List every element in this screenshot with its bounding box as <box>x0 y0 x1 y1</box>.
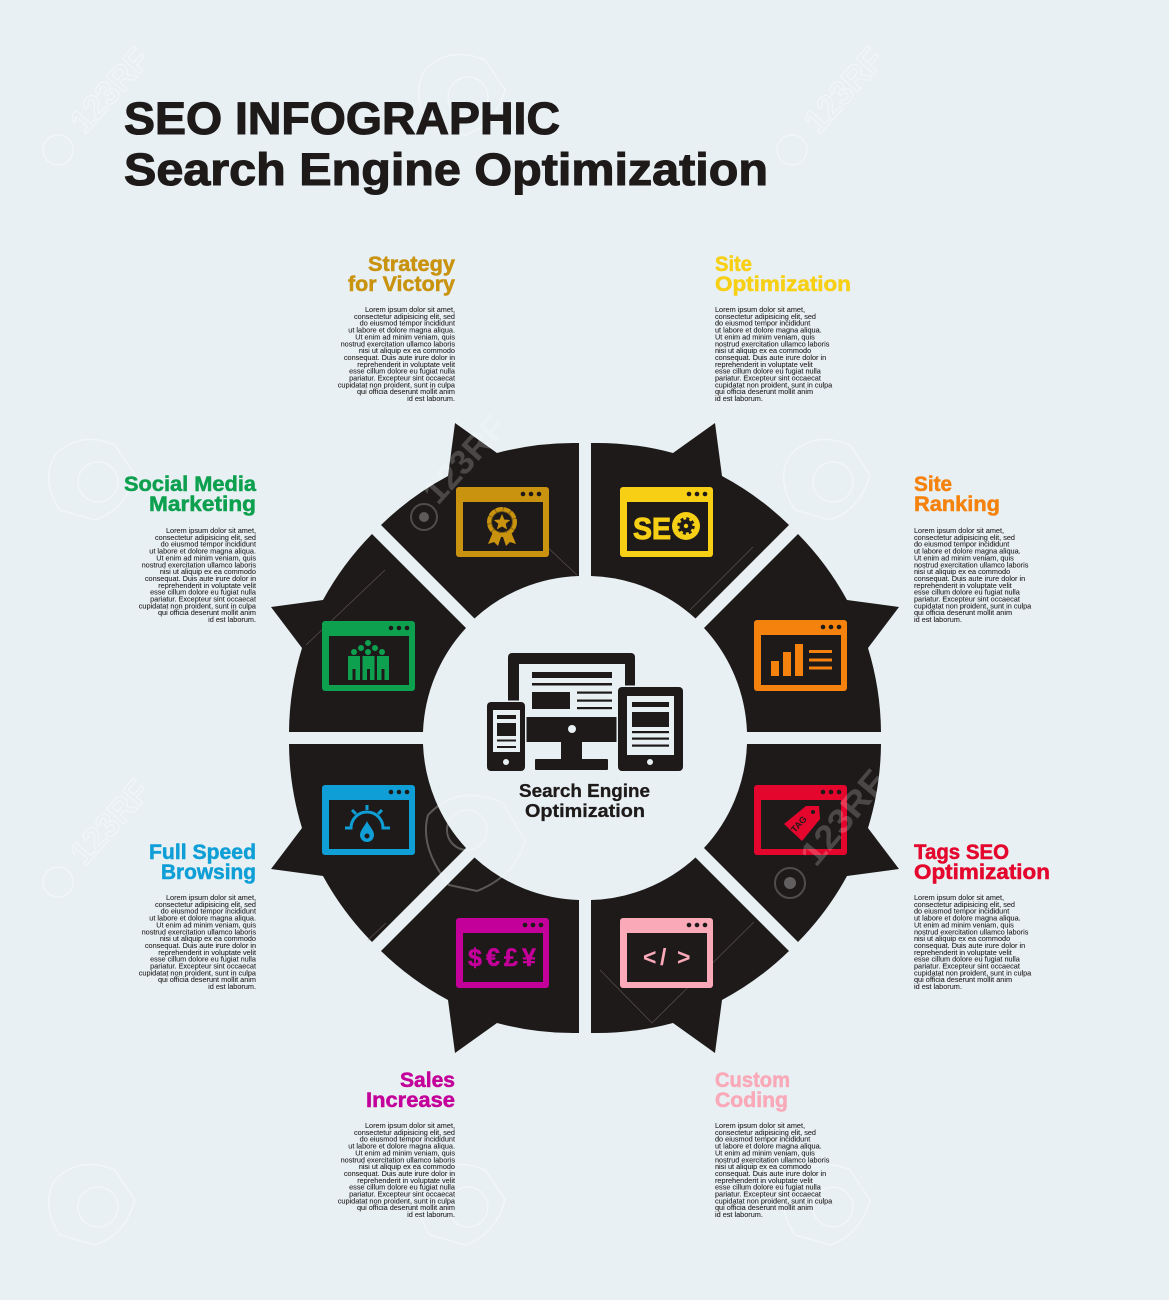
segment: full speed browsing <box>271 744 466 942</box>
body text: cupidatat non proident, sunt in culpa <box>139 601 257 610</box>
body text: esse cillum dolore eu fugiat nulla <box>914 588 1021 597</box>
watermarks on background: 123RF <box>63 773 158 872</box>
heading: Site <box>715 253 752 276</box>
body text: cupidatat non proident, sunt in culpa <box>715 380 833 389</box>
body text: nisi ut aliquip ex ea commodo <box>715 346 811 355</box>
body text: qui officia deserunt mollit anim <box>715 387 813 396</box>
body text: Ut enim ad minim veniam, quis <box>355 1148 455 1157</box>
body text: consequat. Duis aute irure dolor in <box>145 574 256 583</box>
body text: do eiusmod tempor incididunt <box>914 540 1009 549</box>
segment: strategy for victory <box>381 423 579 618</box>
body text: Lorem ipsum dolor sit amet, <box>365 305 455 314</box>
body text: ut labore et dolore magna aliqua. <box>914 914 1021 923</box>
panel: strategy for victory <box>338 253 456 403</box>
body text: do eiusmod tempor incididunt <box>914 907 1009 916</box>
heading: Strategy <box>368 253 455 276</box>
body text: id est laborum. <box>208 982 256 991</box>
body text: nisi ut aliquip ex ea commodo <box>359 1162 455 1171</box>
heading: Sales <box>400 1069 455 1092</box>
body text: nisi ut aliquip ex ea commodo <box>715 1162 811 1171</box>
body text: id est laborum. <box>914 982 962 991</box>
body text: pariatur. Excepteur sint occaecat <box>715 1190 821 1198</box>
body text: Ut enim ad minim veniam, quis <box>914 920 1014 929</box>
body text: pariatur. Excepteur sint occaecat <box>715 374 821 382</box>
watermark over dark segments: 123RF <box>416 408 514 511</box>
body text: id est laborum. <box>208 615 256 624</box>
body text: consectetur adipisicing elit, sed <box>354 312 455 321</box>
body text: do eiusmod tempor incididunt <box>360 319 455 328</box>
body text: nisi ut aliquip ex ea commodo <box>914 934 1010 943</box>
heading: Site <box>914 473 952 496</box>
heading <box>124 473 256 516</box>
body text: qui officia deserunt mollit anim <box>357 1203 455 1212</box>
icon: ranking window <box>754 620 847 691</box>
body text: qui officia deserunt mollit anim <box>158 608 256 617</box>
body text: ut labore et dolore magna aliqua. <box>715 1142 822 1151</box>
body text: nostrud exercitation ullamco laboris <box>341 339 455 348</box>
body text: id est laborum. <box>407 394 455 403</box>
body text: consequat. Duis aute irure dolor in <box>145 941 256 950</box>
heading: Coding <box>715 1089 788 1112</box>
body text: qui officia deserunt mollit anim <box>914 608 1012 617</box>
body text: Lorem ipsum dolor sit amet, <box>166 526 256 535</box>
watermarks on background <box>43 41 892 1245</box>
panel: tags seo optimization <box>914 841 1050 991</box>
body text: consectetur adipisicing elit, sed <box>715 1128 816 1137</box>
body text: cupidatat non proident, sunt in culpa <box>338 1196 456 1205</box>
body text: pariatur. Excepteur sint occaecat <box>349 1190 455 1198</box>
body text: reprehenderit in voluptate velit <box>715 360 813 369</box>
heading <box>348 253 455 296</box>
panel: site ranking <box>914 473 1032 624</box>
heading: Custom <box>715 1069 790 1092</box>
body text: id est laborum. <box>715 1210 763 1219</box>
body text: consequat. Duis aute irure dolor in <box>344 353 455 362</box>
wheel of eight segments <box>271 423 899 1053</box>
body text: reprehenderit in voluptate velit <box>914 581 1012 590</box>
body text: nostrud exercitation ullamco laboris <box>914 560 1029 569</box>
panel: social media marketing <box>124 473 257 624</box>
body text: esse cillum dolore eu fugiat nulla <box>715 367 822 376</box>
heading: for Victory <box>348 273 455 296</box>
watermark over dark segments: 123RF <box>793 763 894 873</box>
panel: custom coding <box>715 1069 833 1219</box>
body text: id est laborum. <box>407 1210 455 1219</box>
segment: tags seo optimization <box>704 744 899 942</box>
body text: Lorem ipsum dolor sit amet, <box>715 305 805 314</box>
body text: ut labore et dolore magna aliqua. <box>914 547 1021 556</box>
body text: consequat. Duis aute irure dolor in <box>914 574 1025 583</box>
body text: consectetur adipisicing elit, sed <box>155 900 256 909</box>
icon: currency window <box>456 918 549 988</box>
heading: Full Speed <box>149 841 256 864</box>
watermark over dark segments <box>411 408 894 898</box>
panel: site optimization <box>715 253 851 403</box>
body text: consectetur adipisicing elit, sed <box>354 1128 455 1137</box>
heading: Social Media <box>124 473 256 496</box>
body text: pariatur. Excepteur sint occaecat <box>150 594 256 604</box>
body text: Lorem ipsum dolor sit amet, <box>914 526 1004 535</box>
icon: seo window <box>620 487 713 557</box>
body text: consequat. Duis aute irure dolor in <box>715 353 826 362</box>
panel: full speed browsing <box>139 841 257 991</box>
body text: do eiusmod tempor incididunt <box>715 1135 810 1144</box>
body text: nostrud exercitation ullamco laboris <box>914 927 1029 936</box>
body text: pariatur. Excepteur sint occaecat <box>349 374 455 382</box>
body text: pariatur. Excepteur sint occaecat <box>150 962 256 970</box>
center label: Optimization <box>525 801 645 821</box>
body text: pariatur. Excepteur sint occaecat <box>914 962 1020 970</box>
body text: qui officia deserunt mollit anim <box>914 975 1012 984</box>
body text: consequat. Duis aute irure dolor in <box>914 941 1025 950</box>
segment: social media marketing <box>271 534 466 732</box>
heading <box>715 253 851 296</box>
body text: do eiusmod tempor incididunt <box>715 319 810 328</box>
body text: consequat. Duis aute irure dolor in <box>344 1169 455 1178</box>
heading <box>366 1069 455 1112</box>
body text: nisi ut aliquip ex ea commodo <box>160 934 256 943</box>
body text: consequat. Duis aute irure dolor in <box>715 1169 826 1178</box>
body text: qui officia deserunt mollit anim <box>357 387 455 396</box>
segment: custom coding <box>591 858 789 1053</box>
center label <box>519 781 650 821</box>
body text: consectetur adipisicing elit, sed <box>914 900 1015 909</box>
body text: nostrud exercitation ullamco laboris <box>715 339 830 348</box>
body text: reprehenderit in voluptate velit <box>357 1176 455 1185</box>
body text: ut labore et dolore magna aliqua. <box>149 547 256 556</box>
body text: esse cillum dolore eu fugiat nulla <box>349 367 456 376</box>
title: SEO INFOGRAPHIC <box>124 93 560 144</box>
phone <box>486 700 526 772</box>
heading: Increase <box>366 1089 455 1112</box>
title: Search Engine Optimization <box>124 144 768 195</box>
body text: ut labore et dolore magna aliqua. <box>348 1142 455 1151</box>
body text: Ut enim ad minim veniam, quis <box>156 920 256 929</box>
body text: nisi ut aliquip ex ea commodo <box>914 567 1010 576</box>
panel: sales increase <box>338 1069 456 1219</box>
monitor <box>508 653 635 770</box>
body text: esse cillum dolore eu fugiat nulla <box>150 955 257 964</box>
body text: nisi ut aliquip ex ea commodo <box>160 567 256 576</box>
body text: cupidatat non proident, sunt in culpa <box>139 968 257 977</box>
body text: do eiusmod tempor incididunt <box>161 907 256 916</box>
icon: social media window <box>322 621 415 691</box>
icon: strategy window <box>456 487 549 557</box>
body text: reprehenderit in voluptate velit <box>357 360 455 369</box>
body text: cupidatat non proident, sunt in culpa <box>338 380 456 389</box>
body text: cupidatat non proident, sunt in culpa <box>914 601 1032 610</box>
body text: consectetur adipisicing elit, sed <box>914 533 1015 542</box>
body text: cupidatat non proident, sunt in culpa <box>715 1196 833 1205</box>
body text: nostrud exercitation ullamco laboris <box>341 1155 455 1164</box>
body text: esse cillum dolore eu fugiat nulla <box>349 1183 456 1192</box>
heading <box>149 841 256 884</box>
body text: consectetur adipisicing elit, sed <box>155 533 256 542</box>
title <box>124 93 768 195</box>
body text: Ut enim ad minim veniam, quis <box>715 332 815 341</box>
body text: Lorem ipsum dolor sit amet, <box>365 1121 455 1130</box>
heading: Ranking <box>914 493 1000 516</box>
heading: Tags SEO <box>914 841 1009 864</box>
body text: Ut enim ad minim veniam, quis <box>715 1148 815 1157</box>
segment: sales increase <box>381 858 579 1053</box>
segment: site ranking <box>704 534 899 732</box>
heading: Optimization <box>715 273 851 296</box>
body text: esse cillum dolore eu fugiat nulla <box>150 588 257 597</box>
body text: reprehenderit in voluptate velit <box>914 948 1012 957</box>
body text: Lorem ipsum dolor sit amet, <box>914 893 1004 902</box>
icon: currency window: $€£¥ <box>468 944 536 972</box>
watermarks on background: 123RF <box>797 41 892 140</box>
body text: Ut enim ad minim veniam, quis <box>156 553 256 562</box>
heading <box>914 473 1000 516</box>
icon: seo window: SE <box>633 511 671 546</box>
body text: pariatur. Excepteur sint occaecat <box>914 594 1020 604</box>
icon: tag window <box>754 785 847 855</box>
body text: nostrud exercitation ullamco laboris <box>142 927 256 936</box>
body text: nostrud exercitation ullamco laboris <box>715 1155 830 1164</box>
body text: ut labore et dolore magna aliqua. <box>348 326 455 335</box>
watermarks on background: 123RF <box>63 41 158 140</box>
body text: id est laborum. <box>715 394 763 403</box>
body text: Ut enim ad minim veniam, quis <box>355 332 455 341</box>
heading: Optimization <box>914 861 1050 884</box>
body text: Ut enim ad minim veniam, quis <box>914 553 1014 562</box>
tablet <box>616 686 684 772</box>
icon: tag window: TAG <box>789 814 809 834</box>
body text: consectetur adipisicing elit, sed <box>715 312 816 321</box>
icon: code window <box>620 918 713 988</box>
body text: qui officia deserunt mollit anim <box>715 1203 813 1212</box>
body text: do eiusmod tempor incididunt <box>161 540 256 549</box>
center label: Search Engine <box>519 781 650 801</box>
body text: esse cillum dolore eu fugiat nulla <box>715 1183 822 1192</box>
body text: reprehenderit in voluptate velit <box>158 581 256 590</box>
heading <box>715 1069 790 1112</box>
body text: ut labore et dolore magna aliqua. <box>715 326 822 335</box>
body text: Lorem ipsum dolor sit amet, <box>166 893 256 902</box>
body text: id est laborum. <box>914 615 962 624</box>
icon: speed gauge window <box>322 785 415 855</box>
body text: reprehenderit in voluptate velit <box>158 948 256 957</box>
body text: nostrud exercitation ullamco laboris <box>142 560 256 569</box>
segment: site optimization <box>591 423 789 618</box>
body text: esse cillum dolore eu fugiat nulla <box>914 955 1021 964</box>
body text: cupidatat non proident, sunt in culpa <box>914 968 1032 977</box>
body text: do eiusmod tempor incididunt <box>360 1135 455 1144</box>
heading: Browsing <box>161 861 256 884</box>
heading <box>914 841 1050 884</box>
body text: Lorem ipsum dolor sit amet, <box>715 1121 805 1130</box>
heading: Marketing <box>149 493 256 516</box>
icon: code window: </> <box>643 944 690 970</box>
icon: center devices <box>486 653 684 772</box>
body text: reprehenderit in voluptate velit <box>715 1176 813 1185</box>
body text: ut labore et dolore magna aliqua. <box>149 914 256 923</box>
body text: qui officia deserunt mollit anim <box>158 975 256 984</box>
body text: nisi ut aliquip ex ea commodo <box>359 346 455 355</box>
